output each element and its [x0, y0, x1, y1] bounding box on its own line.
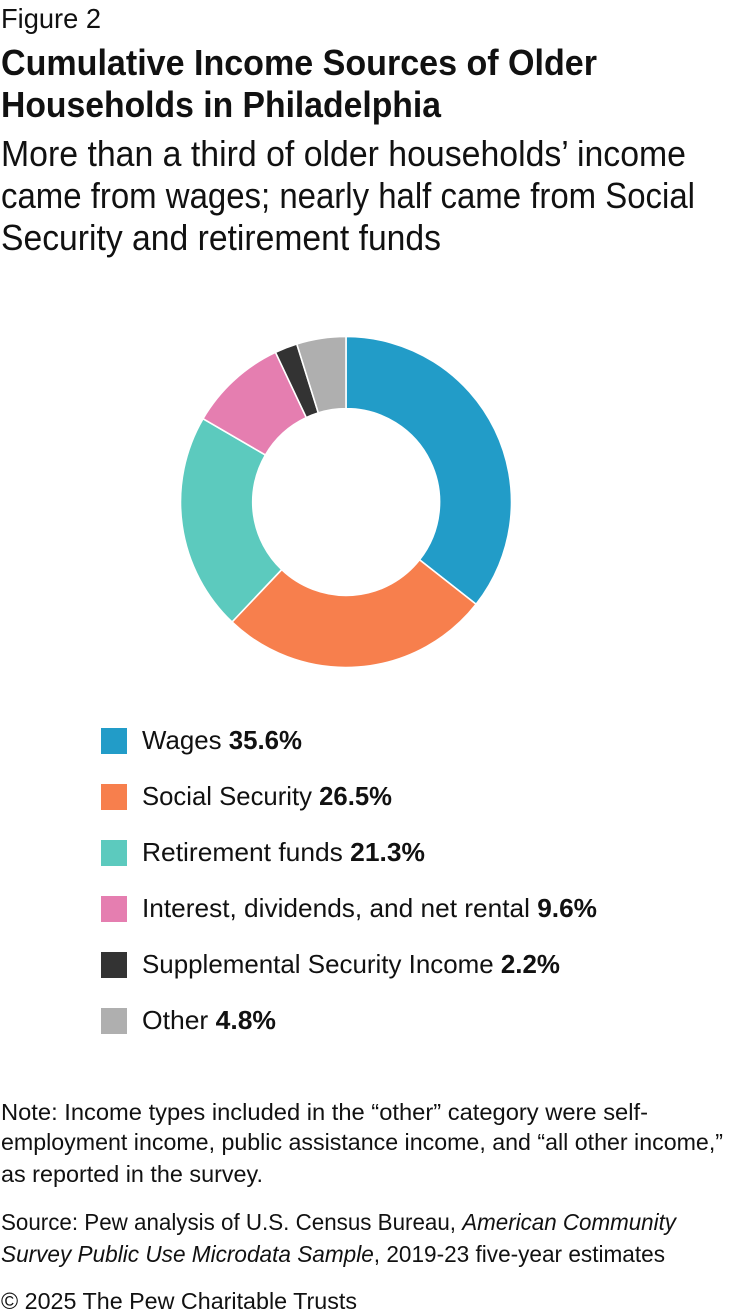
note: employment income, public assistance income, and “all other income,”	[1, 1129, 723, 1155]
subtitle	[1, 133, 695, 258]
legend item: social security: Social Security 26.5%	[142, 781, 392, 811]
figure label: Figure 2	[1, 3, 101, 34]
subtitle: More than a third of older households’ income	[1, 133, 686, 174]
legend item: wages: Wages 35.6%	[142, 725, 302, 755]
note: Note: Income types included in the “other” category were self-	[1, 1099, 648, 1125]
segment: retirement funds	[180, 419, 282, 622]
title: Households in Philadelphia	[1, 84, 442, 125]
copyright: © 2025 The Pew Charitable Trusts	[1, 1288, 357, 1314]
legend	[101, 725, 597, 1035]
legend item: supplemental security income: Supplemental Security Income 2.2%	[142, 949, 560, 979]
donut chart	[180, 336, 512, 668]
note: as reported in the survey.	[1, 1161, 263, 1187]
legend item: other: Other 4.8%	[142, 1005, 276, 1035]
source	[1, 1209, 677, 1267]
segment: other	[297, 336, 346, 413]
legend item: retirement funds: Retirement funds 21.3%	[142, 837, 425, 867]
segment: supplemental security income	[276, 344, 318, 418]
source: Survey Public Use Microdata Sample, 2019-23 five-year estimates	[1, 1241, 665, 1267]
subtitle: Security and retirement funds	[1, 217, 441, 258]
segment: social security	[232, 560, 476, 668]
source: Source: Pew analysis of U.S. Census Bureau, American Community	[1, 1209, 677, 1235]
segment: interest, dividends, net rental	[203, 352, 306, 455]
title: Cumulative Income Sources of Older	[1, 42, 597, 83]
title	[1, 42, 597, 125]
segment: wages	[346, 336, 512, 604]
note	[1, 1099, 723, 1187]
legend item: interest, dividends, and net rental: Interest, dividends, and net rental 9.6%	[142, 893, 597, 923]
